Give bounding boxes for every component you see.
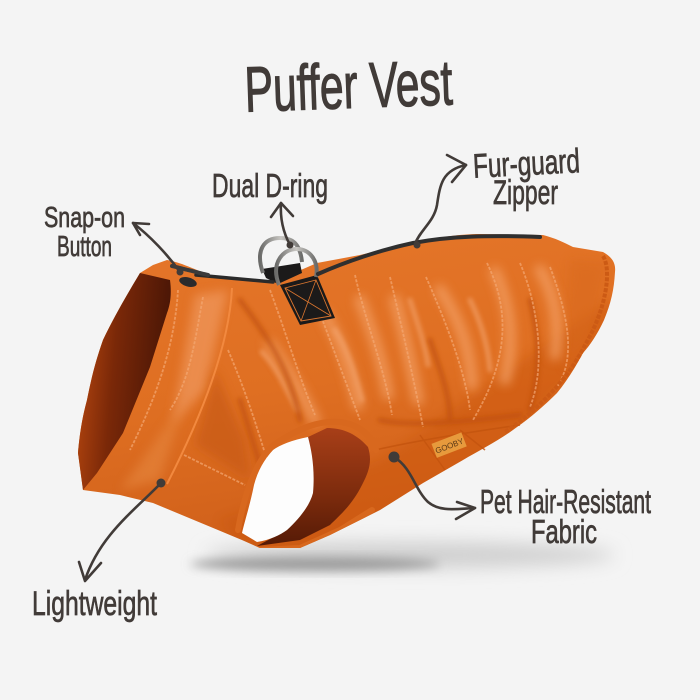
label: Fur-guard Zipper: Zipper — [493, 174, 558, 212]
label: Fur-guard Zipper — [472, 142, 581, 212]
label: Lightweight: Lightweight — [32, 585, 157, 623]
vest shading and highlights — [120, 260, 625, 550]
label: Snap-on Button — [44, 202, 125, 263]
arrow: Snap-on Button — [133, 223, 184, 276]
arrow: Pet Hair-Resistant Fabric — [388, 452, 475, 519]
inner lining of leg hole — [257, 428, 370, 546]
label: Fur-guard Zipper: Fur-guard — [472, 142, 581, 186]
brand label: GOOBY — [434, 436, 465, 456]
vest body — [78, 234, 615, 548]
ground shadow — [190, 542, 615, 571]
label: Pet Hair-Resistant Fabric: Fabric — [531, 513, 597, 550]
leg opening — [242, 437, 314, 542]
arrow: Dual D-ring — [271, 203, 294, 248]
shoulder seam — [167, 288, 232, 484]
label: Dual D-ring: Dual D-ring — [212, 167, 328, 204]
D-rings — [260, 238, 317, 285]
orange puffer vest — [78, 234, 625, 550]
leg opening rim — [238, 422, 376, 550]
dark collar opening — [78, 273, 171, 490]
arrow: Fur-guard Zipper — [414, 155, 466, 248]
quilted stitch lines — [130, 263, 568, 485]
arrow: Lightweight — [79, 478, 166, 581]
zipper — [172, 236, 540, 282]
label: Pet Hair-Resistant Fabric — [480, 483, 651, 550]
label: Snap-on Button: Snap-on — [44, 202, 125, 234]
hem band folds — [375, 425, 520, 470]
brand label — [431, 432, 467, 458]
puffy right edge — [505, 256, 607, 432]
label: Snap-on Button: Button — [57, 231, 112, 263]
snap-on button — [178, 275, 198, 289]
title: Puffer Vest — [243, 46, 454, 126]
D-ring webbing patch — [262, 263, 335, 325]
